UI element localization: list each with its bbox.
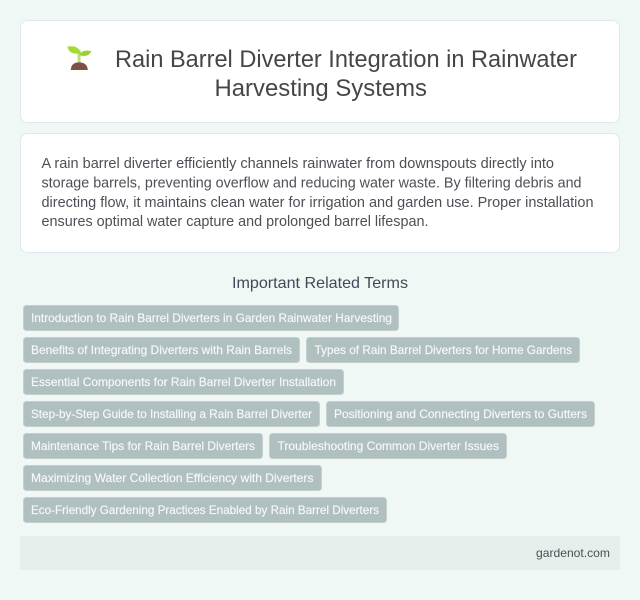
tag: introduction: Introduction to Rain Barrel Diverters in Garden Rainwater Harvesting <box>31 311 392 325</box>
tag: benefits: Benefits of Integrating Diverters with Rain Barrels <box>31 343 292 357</box>
panel: description <box>20 134 620 252</box>
tag list: related terms <box>24 306 594 522</box>
tag: step-by-step <box>24 402 320 426</box>
tag: maximizing <box>24 466 322 490</box>
tag: positioning: Positioning and Connecting Diverters to Gutters <box>334 407 587 421</box>
footer: gardenot.com <box>536 546 610 560</box>
title: Rain Barrel Diverter Integration in Rainwater <box>115 46 577 73</box>
tag: positioning <box>326 402 594 426</box>
text block: description: storage barrels, preventing overflow and reducing water waste. By filtering debris and <box>42 176 582 192</box>
tag: components <box>24 370 344 394</box>
tag: step-by-step: Step-by-Step Guide to Installing a Rain Barrel Diverter <box>31 407 312 421</box>
tag: troubleshooting: Troubleshooting Common Diverter Issues <box>278 439 499 453</box>
header panel <box>20 20 620 122</box>
footer <box>20 536 620 570</box>
tag: types: Types of Rain Barrel Diverters for Home Gardens <box>314 343 572 357</box>
text block: description: directing flow, it maintains clean water for irrigation and garden use. Proper installation <box>42 195 594 211</box>
tag: troubleshooting <box>270 434 506 458</box>
icon: seedling <box>67 46 91 70</box>
tag: maximizing: Maximizing Water Collection Efficiency with Diverters <box>31 471 314 485</box>
text block: description: ensures optimal water capture and prolonged barrel lifespan. <box>42 214 428 230</box>
tag: eco-friendly <box>24 498 386 522</box>
tag: benefits <box>24 338 300 362</box>
tag: maintenance <box>24 434 262 458</box>
text block: description: A rain barrel diverter efficiently channels rainwater from downspouts directly into <box>42 156 554 172</box>
tag: maintenance: Maintenance Tips for Rain Barrel Diverters <box>31 439 255 453</box>
tag: eco-friendly: Eco-Friendly Gardening Practices Enabled by Rain Barrel Diverters <box>31 503 379 517</box>
tag: types <box>306 338 580 362</box>
title: Harvesting Systems <box>214 75 427 102</box>
heading: related terms: Important Related Terms <box>232 275 408 292</box>
text block: description <box>42 156 594 230</box>
tag: components: Essential Components for Rain Barrel Diverter Installation <box>31 375 336 389</box>
tag: introduction <box>24 306 398 330</box>
title <box>115 46 577 102</box>
